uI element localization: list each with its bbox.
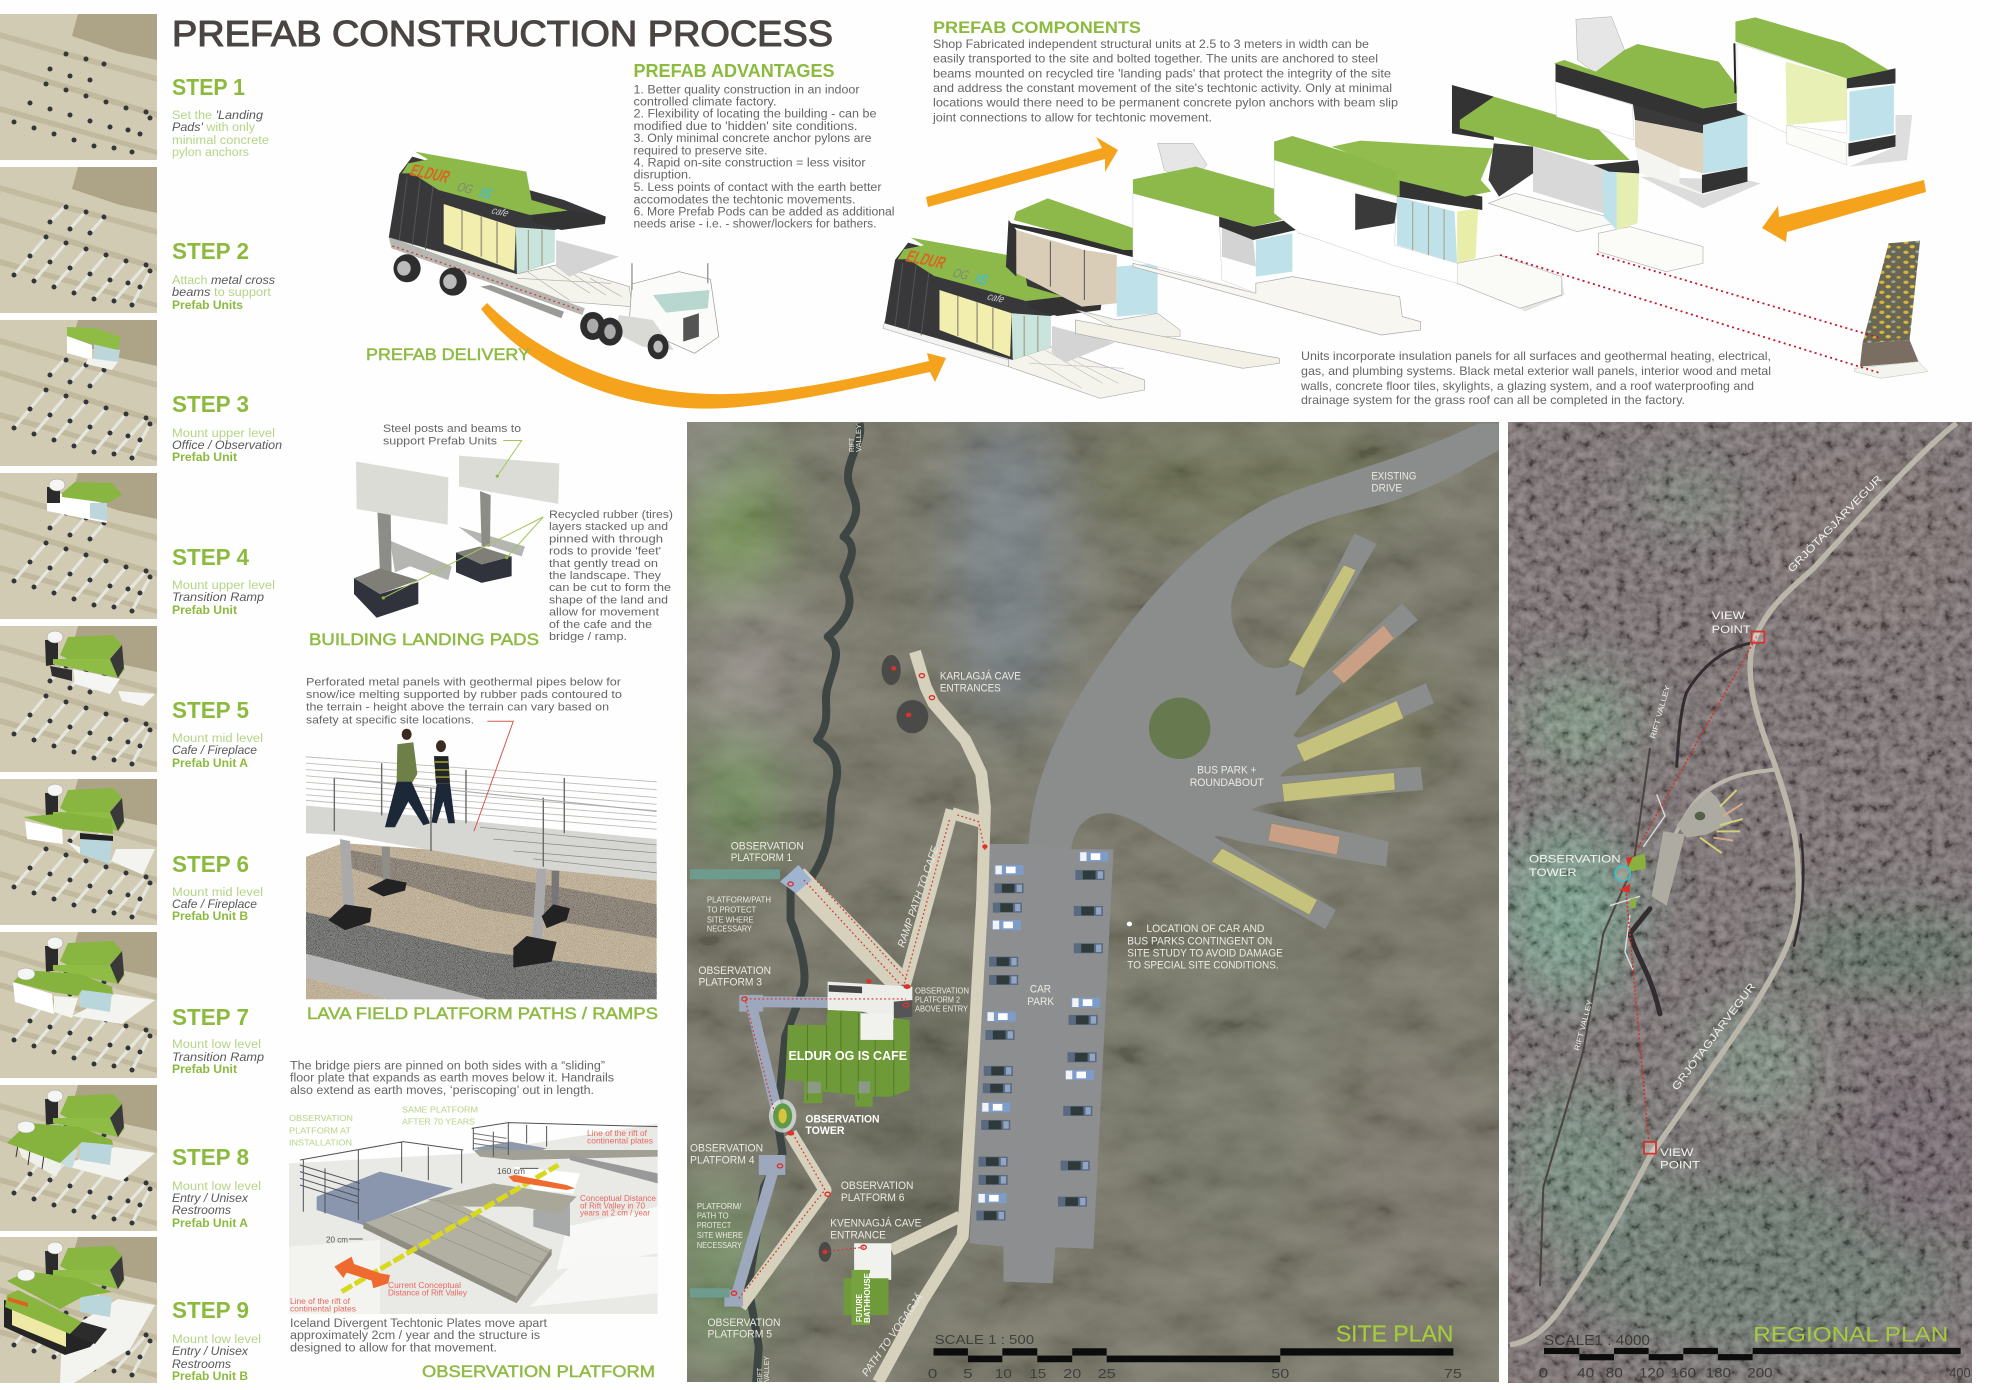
regional plan drawing	[1510, 423, 1971, 1381]
text block: insulation and systems note: drainage system for the grass roof can all be completed in the factory.	[1301, 393, 1685, 407]
scale bar: 5	[963, 1367, 973, 1381]
site plan labels: KVENNAGJÁ CAVE	[830, 1217, 921, 1230]
advantages list: controlled climate factory.	[634, 96, 776, 108]
step 6 caption	[172, 851, 263, 923]
regional scale bar: 400	[1949, 1366, 1971, 1381]
satellite background	[1498, 422, 1998, 1383]
walkways	[740, 652, 986, 1382]
scale bar	[928, 1333, 1462, 1381]
component: second unit	[1006, 198, 1180, 337]
thumbnail: step 1	[0, 14, 157, 160]
step 2 caption: STEP 2	[172, 238, 249, 264]
site plan small labels: PLATFORM/	[697, 1202, 742, 1211]
step 5 caption: Cafe / Fireplace	[172, 745, 257, 757]
illustration: platform over rift	[289, 1123, 658, 1314]
car park	[970, 844, 1114, 1283]
viewpoint markers	[731, 674, 935, 1295]
labels: platform green captions: SAME PLATFORM	[402, 1104, 478, 1114]
parked buses	[1211, 565, 1404, 915]
labels: platform green captions: OBSERVATION	[289, 1113, 353, 1123]
labels: platform red annotations: of Rift Valley in 70	[580, 1201, 645, 1211]
red route dots	[738, 815, 985, 1300]
regional scale bar: SCALE1 : 4000	[1544, 1331, 1650, 1349]
heading: observation platform: OBSERVATION PLATFORM	[422, 1362, 655, 1381]
illustration: ramp section with walkers	[306, 721, 657, 999]
step 8 caption: Prefab Unit A	[172, 1218, 248, 1230]
text: bridge piers note: The bridge piers are pinned on both sides with a “sliding”	[290, 1060, 605, 1072]
text block: prefab advantages	[634, 61, 894, 231]
text: recycled rubber note: Recycled rubber (tires)	[549, 509, 673, 521]
cafe building plan: ELDUR OG IS CAFE	[788, 1049, 907, 1063]
step 6 caption: Mount mid level	[172, 887, 263, 899]
panel: lava field platform paths	[306, 677, 658, 1023]
step 8 caption: Restrooms	[172, 1205, 231, 1217]
heading: lava field platform: LAVA FIELD PLATFORM PATHS / RAMPS	[307, 1004, 658, 1023]
arrow: prefab delivery	[481, 303, 946, 409]
panel: building landing pads	[309, 423, 673, 649]
thumbnail: step 7	[0, 932, 157, 1078]
text: recycled rubber note: pinned with through	[549, 534, 663, 546]
step 9 caption	[172, 1297, 261, 1383]
panel: construction step thumbnails	[0, 14, 157, 1383]
site plan labels: PLATFORM 5	[707, 1328, 772, 1341]
site plan labels: OBSERVATION	[731, 839, 804, 852]
dark ravine	[1630, 643, 1803, 1014]
advantages list: 4. Rapid on-site construction = less visitor	[634, 158, 866, 170]
panel: site plan	[687, 422, 1499, 1382]
advantages list: modified due to 'hidden' site conditions.	[634, 121, 858, 133]
site plan labels: LOCATION OF CAR AND	[1146, 922, 1264, 935]
component: observation tower	[1855, 241, 1928, 378]
component: fourth unit	[1274, 136, 1564, 312]
thumbnail: step 8	[0, 1085, 157, 1231]
components paragraph: Shop Fabricated independent structural units at 2.5 to 3 meters in width can be	[933, 37, 1369, 51]
step 2 caption: Attach metal cross	[172, 275, 275, 287]
text: recycled rubber note	[549, 509, 673, 643]
site plan labels: DRIVE	[1371, 482, 1402, 495]
site plan labels: PLATFORM 3	[698, 976, 762, 989]
future bathhouse	[844, 1243, 891, 1325]
rotated site labels: PATH TO VOGAGJÁ	[859, 1291, 926, 1379]
step 5 caption: STEP 5	[172, 697, 249, 723]
site plan small labels: ABOVE ENTRY	[915, 1004, 968, 1014]
text: recycled rubber note: of the cafe and the	[549, 619, 652, 631]
step 4 caption: Prefab Unit	[172, 605, 237, 617]
rotated regional labels	[1572, 472, 1885, 1093]
regional labels: VIEW	[1660, 1146, 1694, 1159]
advantages list: disruption.	[634, 170, 692, 182]
text: recycled rubber note: rods to provide 'feet'	[549, 545, 661, 557]
component: third unit	[1075, 143, 1421, 368]
site plan small labels: OBSERVATION	[915, 987, 969, 996]
advantages list: accomodates the techtonic movements.	[634, 194, 856, 206]
regional scale bar: 40	[1577, 1366, 1594, 1381]
rotated site labels: VALLEY	[856, 424, 863, 452]
site plan small labels: NECESSARY	[707, 925, 752, 934]
text: perforated panels note: the terrain - height above the terrain can vary based on	[306, 702, 609, 714]
labels: platform red annotations: Distance of Rift Valley	[388, 1288, 468, 1298]
step 7 caption	[172, 1004, 265, 1076]
step 7 caption: STEP 7	[172, 1004, 249, 1030]
step 5 caption: Prefab Unit A	[172, 758, 248, 770]
components paragraph: locations would there need to be permanent concrete pylon anchors with beam slip	[933, 96, 1398, 110]
step 3 caption: Prefab Unit	[172, 452, 237, 464]
thumbnail: step 4	[0, 473, 157, 619]
site plan labels: EXISTING	[1371, 470, 1416, 482]
step 9 caption: Restrooms	[172, 1359, 231, 1371]
rotated site labels: RIFT	[757, 1367, 764, 1382]
text: tectonic plates note	[290, 1318, 548, 1354]
site plan labels: TOWER	[805, 1124, 845, 1137]
step 8 caption	[172, 1144, 261, 1230]
regional labels	[1529, 609, 1751, 1171]
caves	[819, 655, 928, 1262]
step 5 caption: Mount mid level	[172, 733, 263, 745]
text: steel posts note: support Prefab Units	[383, 436, 498, 448]
rotated site labels: VALLEY	[764, 1356, 771, 1382]
regional labels: TOWER	[1529, 866, 1577, 878]
regional scale bar: 80	[1606, 1366, 1623, 1381]
labels: platform red annotations: continental plates	[290, 1304, 356, 1314]
step 8 caption: STEP 8	[172, 1144, 249, 1170]
thumbnail: step 6	[0, 779, 157, 925]
components paragraph: beams mounted on recycled tire 'landing pads' that protect the integrity of the site	[933, 66, 1391, 80]
panel: step captions	[172, 74, 282, 1383]
step 6 caption: STEP 6	[172, 851, 249, 877]
regional scale bar: 120	[1639, 1366, 1664, 1381]
site plan drawing	[690, 423, 1499, 1382]
rotated regional labels: GRJÓTAGJÁRVEGUR	[1669, 980, 1759, 1093]
labels: platform red annotations: Current Conceptual	[388, 1280, 461, 1290]
scale bar: 25	[1098, 1367, 1116, 1381]
labels: platform dimensions: 20 cm	[326, 1235, 348, 1245]
site plan small labels: SITE WHERE	[697, 1231, 743, 1241]
site plan labels: ENTRANCES	[940, 682, 1001, 695]
text: recycled rubber note: that gently tread on	[549, 558, 658, 570]
regional scale bar: 200	[1747, 1366, 1773, 1381]
regional scale bar: 180	[1706, 1366, 1731, 1381]
rotated site labels	[757, 424, 942, 1382]
component: sixth unit	[1554, 17, 1761, 208]
regional scale bar	[1539, 1331, 1971, 1381]
labels: platform green captions: INSTALLATION	[289, 1137, 352, 1147]
components paragraph: joint connections to allow for techtonic movement.	[932, 110, 1212, 124]
text: tectonic plates note: Iceland Divergent Techtonic Plates move apart	[290, 1318, 548, 1330]
step 8 caption: Entry / Unisex	[172, 1193, 249, 1205]
heading: building landing pads: BUILDING LANDING PADS	[309, 631, 539, 649]
heading: prefab advantages: PREFAB ADVANTAGES	[634, 61, 834, 81]
bus park miniature	[1677, 791, 1733, 838]
text: steel posts note	[383, 423, 521, 448]
text: recycled rubber note: shape of the land and	[549, 594, 668, 606]
illustration: truck carrying prefab unit	[389, 152, 719, 359]
site plan labels: PLATFORM 6	[841, 1191, 904, 1204]
thumbnail: step 5	[0, 626, 157, 772]
step 6 caption: Cafe / Fireplace	[172, 899, 257, 911]
labels: platform green captions: AFTER 70 YEARS	[402, 1117, 475, 1127]
site plan labels: TO SPECIAL SITE CONDITIONS.	[1127, 959, 1279, 972]
main road	[1510, 423, 1957, 1345]
labels: platform dimensions: 160 cm	[497, 1166, 525, 1176]
rotated regional labels: GRJÓTAGJÁRVEGUR	[1785, 472, 1885, 575]
red dots	[787, 666, 988, 1254]
advantages list: needs arise - i.e. - shower/lockers for bathers.	[634, 219, 876, 231]
site plan small labels: NECESSARY	[697, 1241, 742, 1250]
rotated regional labels: RIFT VALLEY	[1648, 684, 1672, 740]
bus fingers	[1700, 790, 1743, 853]
step 4 caption: STEP 4	[172, 544, 249, 570]
step 2 caption: beams to support	[172, 287, 272, 299]
step 1 caption: STEP 1	[172, 74, 245, 100]
text block: prefab components	[932, 18, 1398, 124]
advantages list: 2. Flexibility of locating the building - can be	[634, 109, 876, 121]
step 1 caption: pylon anchors	[172, 147, 249, 159]
rotated site labels: RIFT	[849, 437, 856, 452]
tower marker	[1615, 866, 1630, 881]
step 5 caption	[172, 697, 263, 770]
site plan small labels: PROTECT	[697, 1221, 731, 1231]
step 6 caption: Prefab Unit B	[172, 911, 248, 923]
text: recycled rubber note: the landscape. They	[549, 570, 662, 582]
site plan small labels: SITE WHERE	[707, 916, 754, 925]
text: bridge piers note	[290, 1060, 614, 1097]
site plan labels: BUS PARK +	[1197, 764, 1257, 776]
text: recycled rubber note: can be cut to form the	[549, 582, 671, 594]
site plan labels: PLATFORM 4	[690, 1153, 755, 1166]
labels: platform red annotations: continental plates	[587, 1136, 653, 1146]
scale bar: SCALE 1 : 500	[935, 1333, 1034, 1347]
site plan small labels	[697, 896, 969, 1250]
components paragraph: and address the constant movement of the site's techtonic activity. Only at minimal	[933, 81, 1392, 95]
step 4 caption: Mount upper level	[172, 580, 275, 592]
arrow: assembly direction right	[926, 137, 1118, 207]
illustration: landing pads	[354, 441, 559, 618]
text: recycled rubber note: allow for movement	[549, 607, 659, 619]
labels: platform red annotations: Conceptual Distance	[580, 1193, 656, 1203]
regional labels: VIEW	[1712, 609, 1746, 622]
text: tectonic plates note: approximately 2cm / year and the structure is	[290, 1330, 540, 1342]
text block: insulation and systems note: Units incorporate insulation panels for all surfaces and geothermal heating, electrical,	[1301, 349, 1771, 363]
arrow: assembly direction left	[1762, 180, 1926, 242]
figure: man walking	[385, 729, 430, 827]
site plan small labels: PLATFORM 2	[915, 995, 960, 1005]
heading: prefab components: PREFAB COMPONENTS	[933, 18, 1141, 37]
step 2 caption: Prefab Units	[172, 300, 243, 312]
text: perforated panels note: Perforated metal panels with geothermal pipes below for	[306, 677, 621, 689]
labels: platform dimensions	[326, 1166, 525, 1245]
site plan labels: OBSERVATION	[805, 1112, 880, 1125]
regional labels: POINT	[1660, 1159, 1701, 1171]
step 7 caption: Prefab Unit	[172, 1064, 237, 1076]
thumbnail: step 2	[0, 167, 157, 313]
rotated site labels: FUTURE	[855, 1293, 864, 1322]
platform pads	[724, 865, 812, 1307]
step 9 caption: Mount low level	[172, 1334, 261, 1346]
scale note pointer	[1127, 922, 1132, 926]
aerial background	[667, 402, 1507, 1382]
rotated site labels: RAMP PATH TO CAFE	[895, 844, 942, 949]
site plan labels: ENTRANCE	[830, 1229, 886, 1242]
advantages list: 5. Less points of contact with the earth better	[634, 182, 882, 194]
figure: woman walking	[432, 740, 455, 823]
panel: observation platform	[289, 1060, 658, 1381]
text: recycled rubber note: layers stacked up and	[549, 521, 668, 533]
dotted alignment lines	[1500, 254, 1881, 373]
text: bridge piers note: also extend as earth moves, ‘periscoping’ out in length.	[290, 1085, 594, 1097]
parking miniature	[1652, 831, 1685, 906]
step 1 caption: Pads' with only	[172, 122, 255, 134]
illustration: exploded prefab components	[883, 17, 1928, 398]
labels: platform green captions: PLATFORM AT	[289, 1125, 351, 1135]
site plan small labels: PLATFORM/PATH	[707, 896, 771, 905]
bus park and drive	[1029, 423, 1499, 929]
scale bar: 10	[995, 1367, 1012, 1381]
text: bridge piers note: floor plate that expands as earth moves below it. Handrails	[290, 1073, 614, 1085]
site plan labels: BUS PARKS CONTINGENT ON	[1127, 934, 1272, 947]
text block: insulation and systems note: gas, and plumbing systems. Black metal exterior wall panels, interior wood and metal	[1301, 364, 1771, 378]
teal platform bands	[690, 869, 780, 1298]
site plan labels: OBSERVATION	[690, 1142, 763, 1155]
site plan small labels: PATH TO	[697, 1212, 729, 1221]
step 4 caption	[172, 544, 275, 617]
step 3 caption: Mount upper level	[172, 428, 275, 440]
site plan labels: SITE STUDY TO AVOID DAMAGE	[1127, 947, 1283, 960]
site plan labels: KARLAGJÁ CAVE	[940, 670, 1021, 682]
text: recycled rubber note: bridge / ramp.	[549, 631, 627, 643]
rotated regional labels: RIFT VALLEY	[1572, 999, 1594, 1052]
step 1 caption	[172, 74, 269, 159]
site plan labels: PLATFORM 1	[731, 851, 792, 864]
sight lines	[1625, 637, 1757, 1147]
site plan labels: OBSERVATION	[841, 1179, 913, 1192]
labels: platform red annotations: years at 2 cm / year	[580, 1208, 650, 1218]
site plan labels	[690, 470, 1416, 1341]
text block: insulation and systems note: walls, concrete floor tiles, skylights, a glazing system, and a roof waterproofing and	[1300, 379, 1754, 393]
step 9 caption: Prefab Unit B	[172, 1371, 248, 1383]
panel: regional plan	[1508, 422, 1972, 1383]
advantages list	[634, 84, 894, 231]
regional labels: POINT	[1712, 623, 1751, 635]
text: steel posts note: Steel posts and beams to	[383, 423, 521, 435]
step 9 caption: Entry / Unisex	[172, 1346, 249, 1358]
step 1 caption: Set the 'Landing	[172, 110, 264, 122]
regional scale bar: 160	[1671, 1366, 1696, 1381]
site plan labels: ROUNDABOUT	[1190, 776, 1264, 789]
step 8 caption: Mount low level	[172, 1181, 261, 1193]
labels: platform red annotations	[290, 1128, 656, 1314]
parked cars	[976, 852, 1108, 1221]
step 9 caption: STEP 9	[172, 1297, 249, 1323]
component: front cafe unit	[883, 238, 1144, 398]
advantages list: 1. Better quality construction in an indoor	[634, 84, 860, 96]
cafe building plan	[785, 982, 912, 1107]
scale bar: 50	[1271, 1367, 1289, 1381]
text: perforated panels note	[306, 677, 622, 726]
step 7 caption: Transition Ramp	[172, 1052, 265, 1064]
heading: regional plan: REGIONAL PLAN	[1753, 1323, 1948, 1347]
text: perforated panels note: snow/ice melting supported by rubber pads contoured to	[306, 689, 622, 701]
side road	[1667, 770, 1775, 853]
cafe miniature	[1627, 853, 1646, 872]
scale bar: 15	[1029, 1367, 1046, 1381]
step 2 caption	[172, 238, 275, 312]
roundabout island	[1149, 698, 1210, 759]
observation paths	[735, 1002, 902, 1300]
component: seventh unit	[1734, 17, 1912, 167]
site plan labels: CAR	[1030, 983, 1051, 996]
site plan labels: OBSERVATION	[698, 964, 771, 977]
labels: platform red annotations: Line of the rift of	[587, 1128, 648, 1138]
text: perforated panels note: safety at specific site locations.	[306, 714, 474, 726]
text block: insulation and systems note	[1300, 349, 1771, 407]
label: prefab delivery: PREFAB DELIVERY	[366, 345, 530, 364]
step 3 caption: Office / Observation	[172, 440, 282, 452]
red triangles	[1619, 856, 1633, 893]
thumbnail: step 9	[0, 1237, 157, 1383]
step 7 caption: Mount low level	[172, 1039, 261, 1051]
rotated site labels: BATHHOUSE	[863, 1272, 872, 1323]
components paragraph	[932, 37, 1398, 124]
site plan small labels: TO PROTECT	[707, 906, 756, 915]
title: PREFAB CONSTRUCTION PROCESS	[172, 13, 833, 54]
regional scale bar: 0	[1539, 1366, 1548, 1381]
scale bar: 20	[1063, 1367, 1081, 1381]
components paragraph: easily transported to the site and bolted together. The units are anchored to steel	[933, 52, 1378, 66]
scale bar: 75	[1444, 1367, 1462, 1381]
regional labels: OBSERVATION	[1529, 852, 1621, 865]
advantages list: 3. Only minimal concrete anchor pylons are	[634, 133, 872, 145]
component: fifth unit	[1452, 85, 1703, 272]
rift valley trace	[1540, 748, 1650, 1286]
labels: platform green captions	[289, 1104, 478, 1147]
step 3 caption	[172, 391, 282, 464]
site plan labels: OBSERVATION	[707, 1316, 781, 1329]
observation tower plan	[769, 1099, 796, 1133]
labels: platform red annotations: Line of the rift of	[290, 1296, 351, 1306]
view markers	[1644, 632, 1764, 1154]
advantages list: required to preserve site.	[634, 145, 768, 157]
step 3 caption: STEP 3	[172, 391, 249, 417]
text: tectonic plates note: designed to allow for that movement.	[290, 1342, 497, 1354]
step 1 caption: minimal concrete	[172, 135, 269, 147]
scale bar: 0	[928, 1367, 937, 1381]
advantages list: 6. More Prefab Pods can be added as additional	[634, 206, 894, 218]
paths	[1610, 794, 1665, 971]
step 4 caption: Transition Ramp	[172, 592, 265, 604]
rift valley crack	[748, 423, 860, 1382]
thumbnail: step 3	[0, 320, 157, 466]
site plan labels: PARK	[1027, 995, 1054, 1008]
